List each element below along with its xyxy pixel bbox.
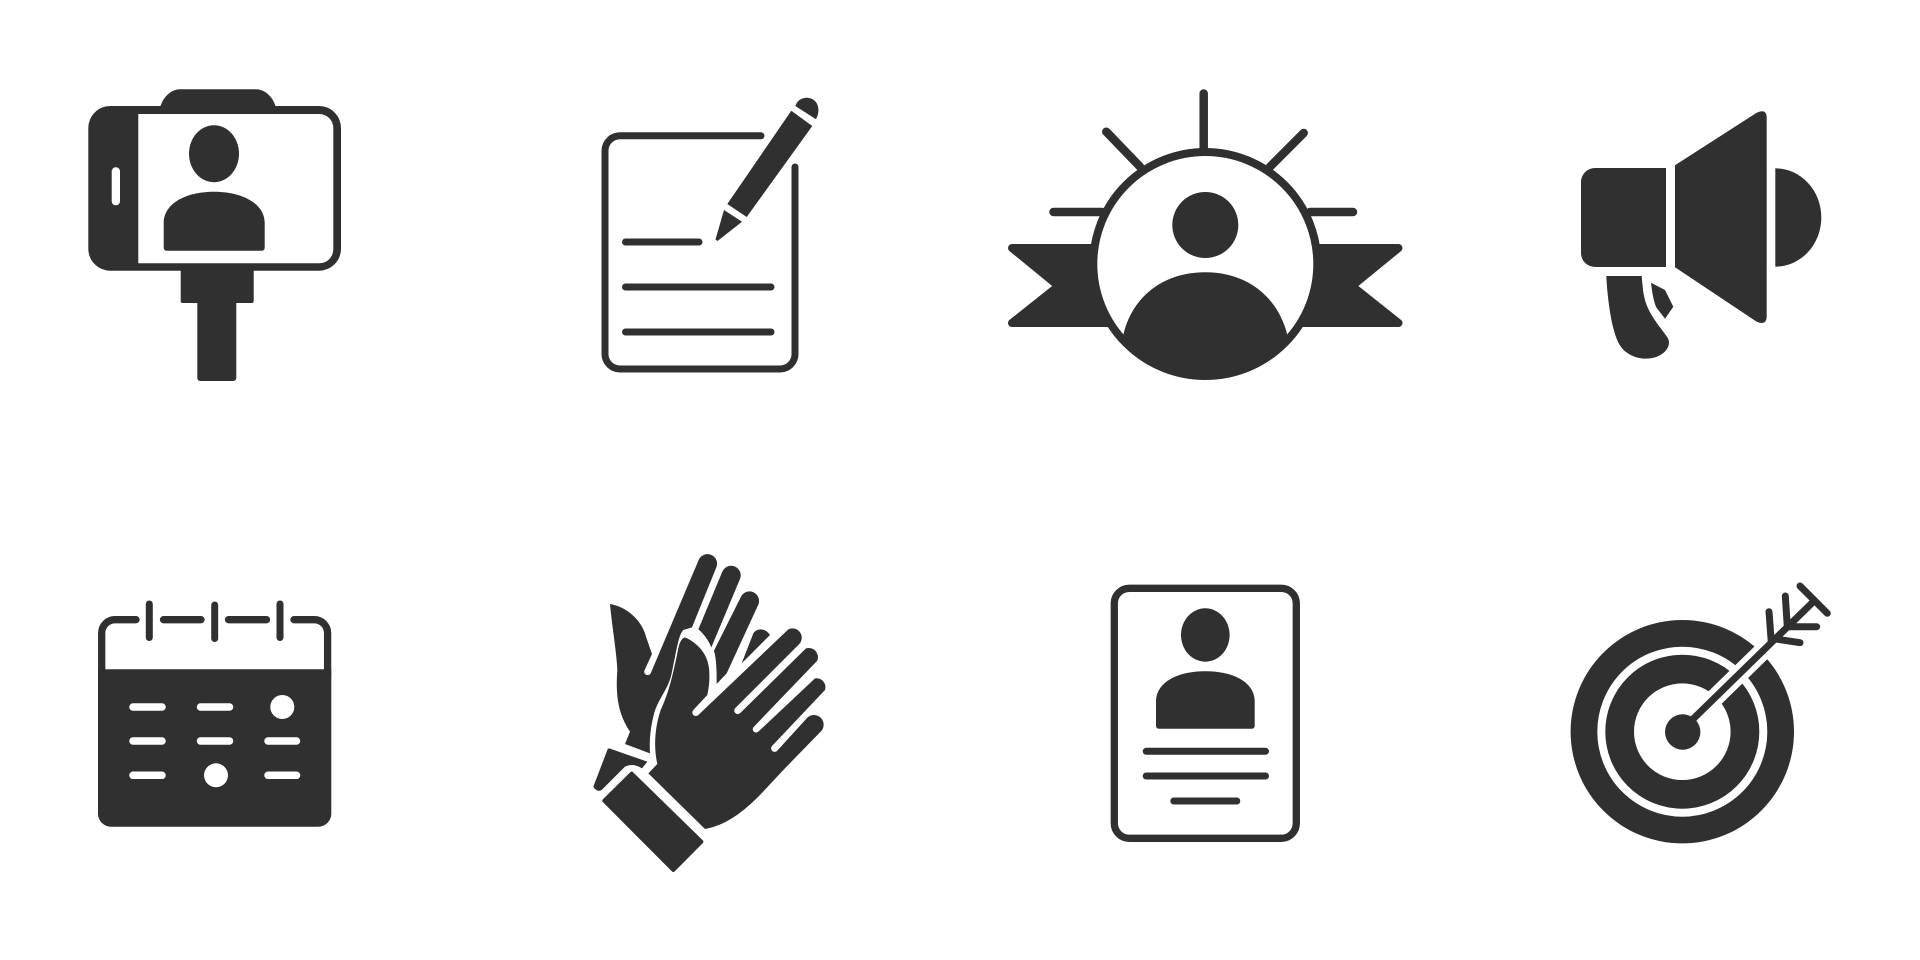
phone top cap	[160, 89, 276, 108]
front cuff	[604, 774, 701, 870]
ribbon	[1012, 248, 1398, 323]
icon: clapping hands	[593, 554, 825, 870]
icon: profile card	[1114, 588, 1296, 838]
calendar rings	[149, 604, 280, 638]
rays	[1054, 94, 1353, 212]
stick mount	[181, 270, 254, 303]
phone button	[112, 167, 120, 205]
bullseye	[1665, 714, 1700, 750]
arrow shaft and fletching	[1690, 586, 1827, 722]
icon: profile badge with ribbon and rays	[1012, 94, 1398, 378]
calendar frame	[102, 620, 328, 675]
calendar body	[98, 669, 331, 827]
person head	[189, 125, 239, 182]
icon: selfie stick with phone	[88, 89, 341, 381]
target outer disc	[1571, 620, 1794, 843]
document text lines	[626, 242, 771, 332]
stick handle	[197, 300, 236, 381]
back hand small finger	[742, 629, 770, 663]
person head	[1172, 192, 1238, 258]
back wrist piece	[593, 748, 647, 791]
pencil body	[727, 111, 812, 217]
back hand third finger	[714, 591, 759, 684]
icon: document with pencil	[605, 98, 818, 369]
person body	[1156, 671, 1255, 729]
front hand	[648, 628, 825, 829]
icon: megaphone	[1581, 111, 1821, 359]
badge circle	[1093, 152, 1317, 376]
person body	[164, 192, 265, 251]
back hand palm and first finger	[610, 554, 717, 753]
card outline	[1114, 588, 1296, 838]
arrow white halo	[1690, 600, 1815, 722]
megaphone cone	[1675, 111, 1767, 323]
icon: calendar	[98, 604, 331, 827]
person head	[1181, 608, 1230, 662]
phone screen	[138, 114, 333, 263]
card text lines	[1146, 751, 1266, 801]
back hand second finger	[698, 566, 741, 647]
date dashes	[133, 707, 296, 775]
megaphone handle box	[1581, 168, 1666, 267]
megaphone grip	[1606, 276, 1669, 359]
document outline	[605, 136, 795, 369]
icon: target with arrow	[1571, 586, 1827, 843]
megaphone front dome	[1775, 168, 1821, 267]
target white ring	[1601, 651, 1763, 813]
megaphone trigger	[1651, 283, 1673, 319]
target white center	[1634, 683, 1731, 780]
date dot two	[204, 763, 228, 787]
phone body	[88, 106, 341, 271]
date dot one	[270, 695, 294, 719]
person body	[1123, 272, 1287, 378]
pencil eraser	[795, 98, 818, 119]
pencil tip	[716, 210, 742, 241]
